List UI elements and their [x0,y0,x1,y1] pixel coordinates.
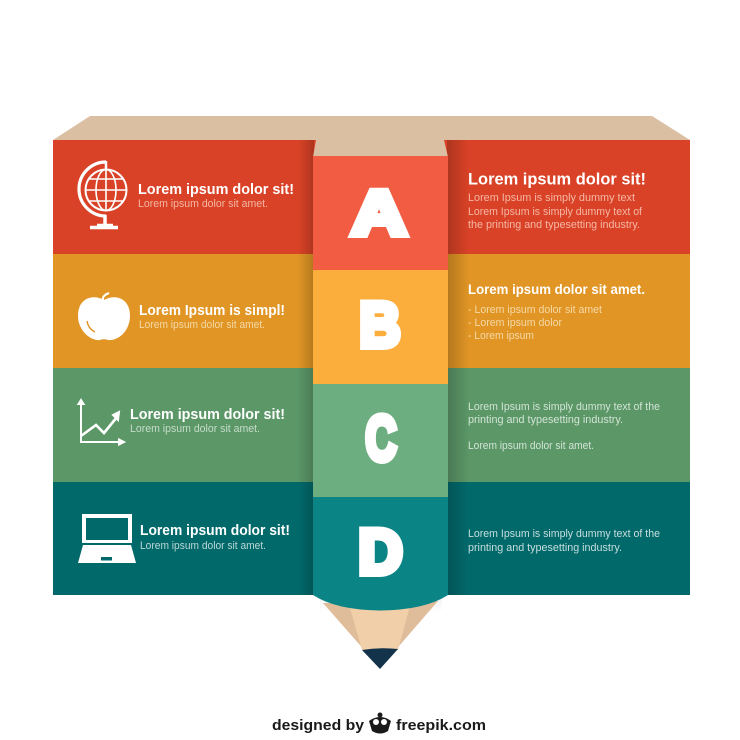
panel: red band [53,140,690,254]
icon: apple [78,293,130,340]
text: orange right: - Lorem ipsum [468,330,534,342]
text: green right [468,401,660,452]
text: green right: Lorem Ipsum is simply dummy text of the [468,401,660,413]
text: green left: Lorem ipsum dolor sit! [130,406,285,423]
pencil segment D: D [358,518,402,588]
pencil segment B [313,270,448,384]
text: green right: printing and typesetting industry. [468,414,623,426]
text: orange right [468,281,645,342]
text: green left [130,406,285,435]
text: teal left: Lorem ipsum dolor sit amet. [140,540,266,552]
text: red right [468,170,646,231]
text: teal right: printing and typesetting industry. [468,542,622,554]
pencil segment C: C [366,404,396,474]
footer credit: designed by [272,717,365,734]
text: orange left: Lorem Ipsum is simpl! [139,302,285,319]
panel: green band [53,368,690,482]
text: teal right: Lorem Ipsum is simply dummy text of the [468,528,660,540]
text: red right: Lorem ipsum dolor sit! [468,170,646,188]
pencil segment A [313,156,448,270]
pencil tip [323,601,438,669]
text: teal left: Lorem ipsum dolor sit! [140,522,290,539]
text: green right: Lorem ipsum dolor sit amet. [468,440,594,452]
text: red right: Lorem Ipsum is simply dummy text [468,192,635,204]
text: orange left: Lorem ipsum dolor sit amet. [139,319,265,331]
top face of folded banner [53,116,690,140]
text: teal left [140,522,290,552]
pencil segment D [313,497,448,610]
text: orange right: Lorem ipsum dolor sit amet. [468,281,645,297]
icon: line chart [78,400,124,444]
text: red left: Lorem ipsum dolor sit amet. [138,198,268,210]
text: red left [138,181,294,210]
text: red right: the printing and typesetting industry. [468,219,640,231]
pencil segment C [313,384,448,498]
icon: globe [79,161,127,228]
text: orange left [139,302,285,331]
text: green left: Lorem ipsum dolor sit amet. [130,423,260,435]
panel: teal band [53,482,690,595]
text: orange right: - Lorem ipsum dolor [468,317,562,329]
panel: orange band [53,254,690,368]
pencil segment B: B [360,290,400,360]
text: red right: Lorem Ipsum is simply dummy text of [468,206,643,218]
footer credit: freepik.com [396,717,486,734]
pencil segment A: A [352,178,406,248]
text: red left: Lorem ipsum dolor sit! [138,181,294,198]
icon: freepik logo [369,712,391,734]
pencil neck [313,140,448,157]
icon: laptop [78,514,136,563]
footer credit [272,712,486,734]
text: teal right [468,528,660,554]
graphite point [362,648,398,669]
text: orange right: - Lorem ipsum dolor sit amet [468,304,602,316]
